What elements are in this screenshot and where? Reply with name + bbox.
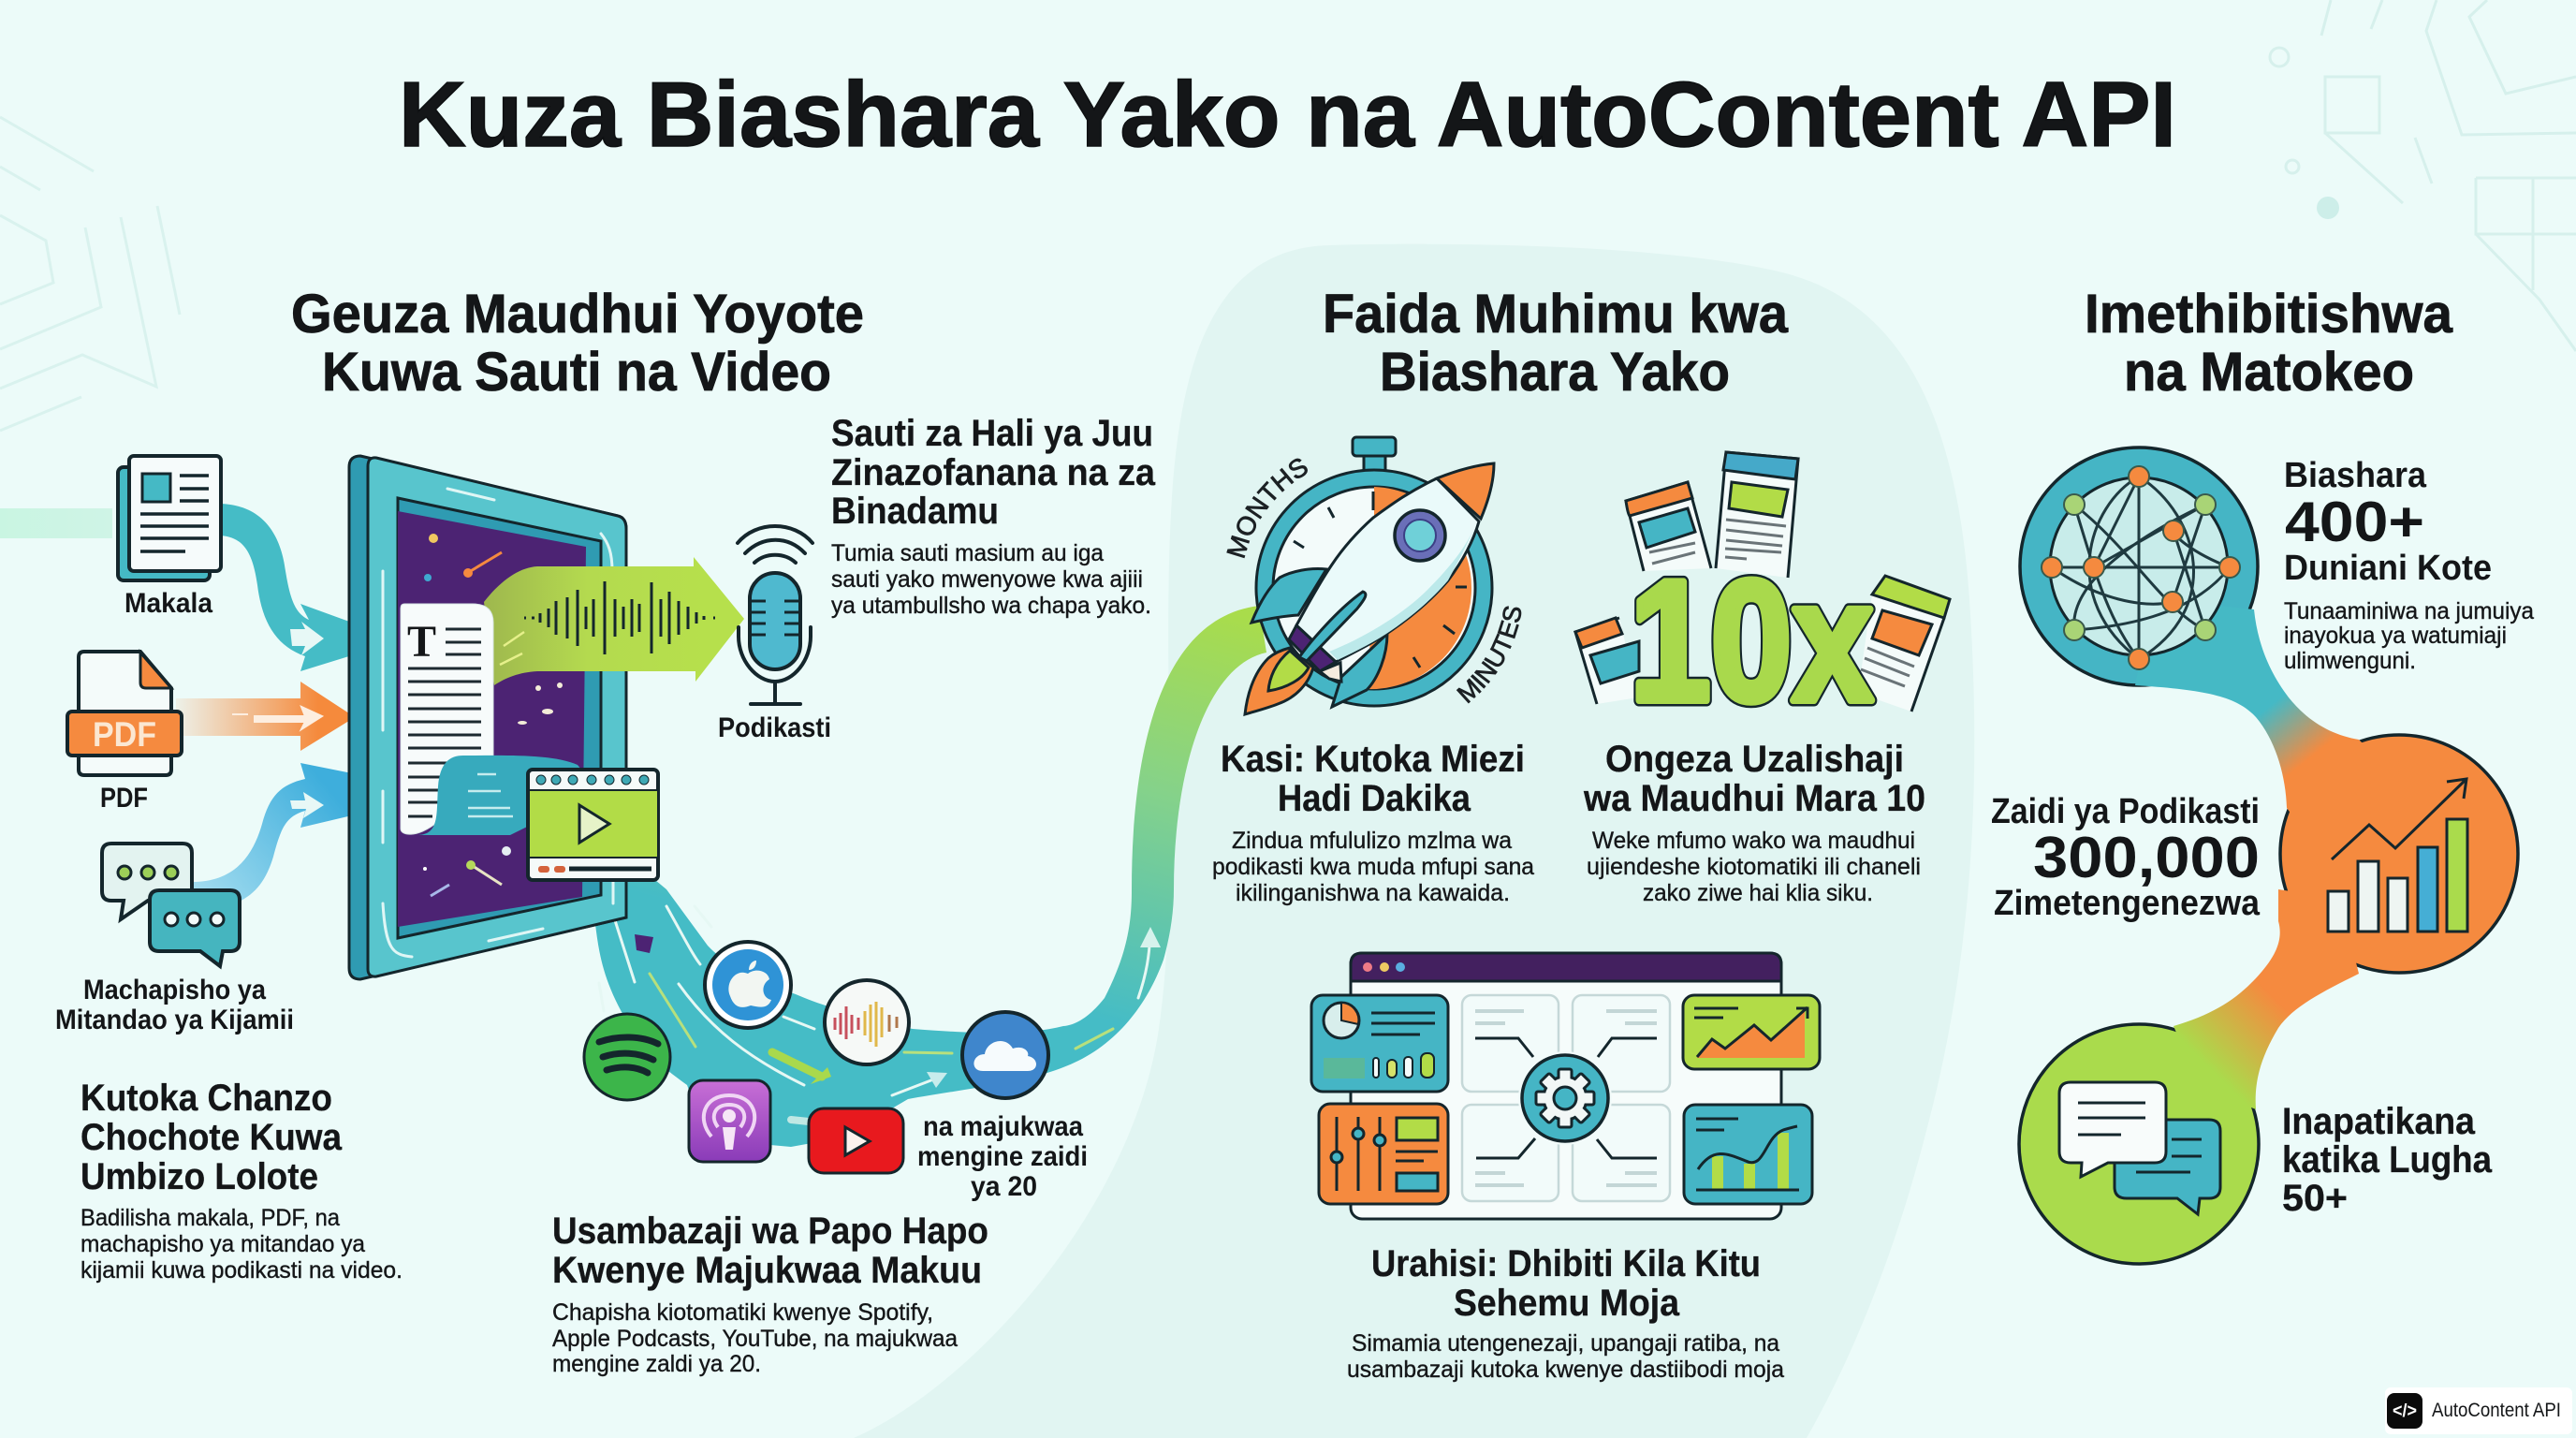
logo badge: </> — [2393, 1401, 2417, 1421]
icon: growth chart — [2328, 779, 2467, 932]
sound wave — [524, 581, 715, 654]
icon: spotify — [584, 1014, 670, 1100]
stat: businesses: ulimwenguni. — [2284, 648, 2416, 674]
heading: content to audio and video — [291, 284, 864, 403]
panel: analytics teal — [1311, 995, 1448, 1092]
heading: proven by results: Imethibitishwa — [2085, 284, 2453, 345]
screen sparkles — [423, 534, 563, 896]
panel: chart teal — [1684, 1105, 1812, 1204]
text block: simplicity: Simamia utengenezaji, upangaji ratiba, na — [1352, 1330, 1779, 1357]
distribution river — [562, 606, 1266, 1147]
text block: human like audio: Zinazofanana na za — [831, 452, 1156, 493]
icon: cloud platform — [962, 1012, 1048, 1098]
stat: languages — [2282, 1101, 2493, 1219]
stat: businesses: Biashara — [2284, 456, 2427, 495]
text block: instant distribution: Kwenye Majukwaa Makuu — [552, 1250, 982, 1291]
logo badge — [2385, 1387, 2572, 1434]
arrow: social posts to tablet — [192, 763, 352, 913]
heading: proven by results: na Matokeo — [2124, 342, 2414, 403]
tablet: T — [407, 617, 436, 667]
mint strip — [0, 508, 112, 538]
icon: podcast microphone — [738, 526, 812, 704]
icon: apple podcasts logo — [705, 942, 791, 1028]
page curl — [417, 756, 599, 835]
stat: podcasts: 300,000 — [2033, 826, 2260, 890]
text block: simplicity: Urahisi: Dhibiti Kila Kitu — [1371, 1243, 1761, 1284]
stat: businesses: Tunaaminiwa na jumuiya — [2284, 598, 2534, 624]
label: more platforms: mengine zaidi — [917, 1141, 1088, 1172]
stat: podcasts: Zimetengenezwa — [1994, 884, 2261, 923]
title: Kuza Biashara Yako na AutoContent API — [399, 63, 2176, 166]
text block: speed: ikilinganishwa na kawaida. — [1236, 880, 1510, 906]
label: more platforms: ya 20 — [971, 1171, 1037, 1202]
text block: 10x output: Weke mfumo wako wa maudhui — [1592, 828, 1915, 854]
icon: article — [118, 456, 221, 580]
stat: businesses: 400+ — [2285, 491, 2424, 553]
text block: human like audio: Sauti za Hali ya Juu — [831, 413, 1153, 454]
text block: any source to any format: Chochote Kuwa — [80, 1117, 343, 1158]
icon: youtube — [809, 1108, 903, 1173]
label: social posts — [55, 975, 294, 1035]
text block: human like audio: sauti yako mwenyowe kwa ajiii — [831, 566, 1143, 593]
stat: podcasts — [1991, 792, 2261, 923]
document in tablet — [401, 604, 493, 834]
text block: simplicity: usambazaji kutoka kwenye dastiibodi moja — [1347, 1357, 1784, 1383]
icon: language bubbles — [2059, 1082, 2220, 1214]
icon: 10x content — [1575, 452, 1950, 737]
heading: key benefits — [1323, 284, 1789, 403]
text block: any source to any format: Badilisha makala, PDF, na — [80, 1205, 340, 1231]
heading: key benefits: Faida Muhimu kwa — [1323, 284, 1789, 345]
stat: businesses — [2284, 456, 2534, 674]
benefits panel background — [854, 244, 1974, 1438]
heading: proven by results — [2085, 284, 2453, 403]
icon: social chat bubbles — [102, 844, 240, 966]
label: article: Makala — [124, 588, 212, 619]
text block: speed: Hadi Dakika — [1278, 778, 1471, 819]
tablet — [349, 456, 744, 979]
waveform arrow — [484, 557, 744, 685]
icon: stopwatch and rocket — [1226, 436, 1522, 717]
heading: content to audio and video: Geuza Maudhui Yoyote — [291, 284, 864, 345]
text block: speed: Kasi: Kutoka Miezi — [1221, 739, 1525, 780]
stat: languages: 50+ — [2282, 1178, 2348, 1219]
heading: key benefits: Biashara Yako — [1380, 342, 1730, 403]
flame — [1245, 648, 1313, 714]
video card — [528, 770, 658, 880]
icon: 10x content: 10x — [1630, 544, 1873, 737]
icon: global network — [2042, 466, 2240, 669]
label: more platforms: na majukwaa — [923, 1111, 1083, 1142]
text block: instant distribution: Usambazaji wa Papo Hapo — [552, 1211, 988, 1252]
text block: human like audio — [831, 413, 1156, 619]
text block: instant distribution: mengine zaldi ya 20. — [552, 1351, 761, 1377]
text block: any source to any format: machapisho ya mitandao ya — [80, 1231, 365, 1257]
icon: sound wave logo — [825, 980, 909, 1064]
label: social posts: Mitandao ya Kijamii — [55, 1005, 294, 1035]
icon: pdf: PDF — [93, 715, 156, 754]
icon: dashboard — [1311, 953, 1820, 1219]
stopwatch labels: MONTHS — [1226, 459, 1308, 558]
text block: any source to any format — [80, 1078, 402, 1284]
text block: simplicity — [1347, 1243, 1784, 1383]
text block: speed: Zindua mfululizo mzlma wa — [1232, 828, 1512, 854]
label: podcast: Podikasti — [718, 712, 831, 743]
text block: human like audio: Tumia sauti masium au iga — [831, 540, 1104, 566]
stat: businesses: Duniani Kote — [2284, 549, 2492, 588]
panel: controls orange — [1319, 1104, 1448, 1204]
label: social posts: Machapisho ya — [83, 975, 266, 1005]
text block: any source to any format: kijamii kuwa podikasti na video. — [80, 1257, 402, 1284]
text block: any source to any format: Umbizo Lolote — [80, 1156, 318, 1197]
label: pdf: PDF — [100, 783, 148, 814]
text block: simplicity: Sehemu Moja — [1454, 1283, 1680, 1324]
stat: businesses: inayokua ya watumiaji — [2284, 623, 2507, 649]
stat: languages: Inapatikana — [2282, 1101, 2476, 1142]
dashboard cells — [1462, 995, 1670, 1201]
icon: pdf — [67, 652, 182, 775]
text block: speed — [1212, 739, 1534, 906]
panel: chart green — [1683, 995, 1820, 1069]
text block: 10x output — [1583, 739, 1925, 906]
text block: instant distribution: Chapisha kiotomatiki kwenye Spotify, — [552, 1299, 933, 1326]
decorative lines left — [0, 117, 180, 431]
metrics chain — [2019, 448, 2518, 1264]
rocket body — [1296, 478, 1479, 662]
arrow: article to tablet — [217, 504, 352, 671]
text block: speed: podikasti kwa muda mfupi sana — [1212, 854, 1534, 880]
icon: apple podcasts — [689, 1080, 770, 1162]
icon: 10x content: 10x — [1630, 544, 1873, 737]
nozzle — [1320, 663, 1341, 682]
rocket fins — [1251, 568, 1326, 623]
text block: 10x output: Ongeza Uzalishaji — [1605, 739, 1904, 780]
logo badge: AutoContent API — [2432, 1400, 2561, 1421]
text block: 10x output: wa Maudhui Mara 10 — [1583, 778, 1925, 819]
text block: 10x output: ujiendeshe kiotomatiki ili chaneli — [1587, 854, 1921, 880]
text block: instant distribution — [552, 1211, 988, 1377]
arrow: pdf to tablet — [176, 682, 352, 751]
text block: human like audio: ya utambullsho wa chapa yako. — [831, 593, 1151, 619]
icon: stopwatch and rocket: MINUTES — [1456, 606, 1522, 704]
text block: any source to any format: Kutoka Chanzo — [80, 1078, 332, 1119]
text block: 10x output: zako ziwe hai klia siku. — [1643, 880, 1873, 906]
heading: content to audio and video: Kuwa Sauti na Video — [322, 342, 831, 403]
text block: human like audio: Binadamu — [831, 491, 999, 532]
stat: podcasts: Zaidi ya Podikasti — [1991, 792, 2260, 831]
decorative lines right — [2270, 0, 2576, 351]
gear hub — [1518, 1051, 1612, 1145]
stat: languages: katika Lugha — [2282, 1139, 2493, 1181]
text block: instant distribution: Apple Podcasts, YouTube, na majukwaa — [552, 1326, 958, 1352]
label: more platforms — [917, 1111, 1088, 1202]
